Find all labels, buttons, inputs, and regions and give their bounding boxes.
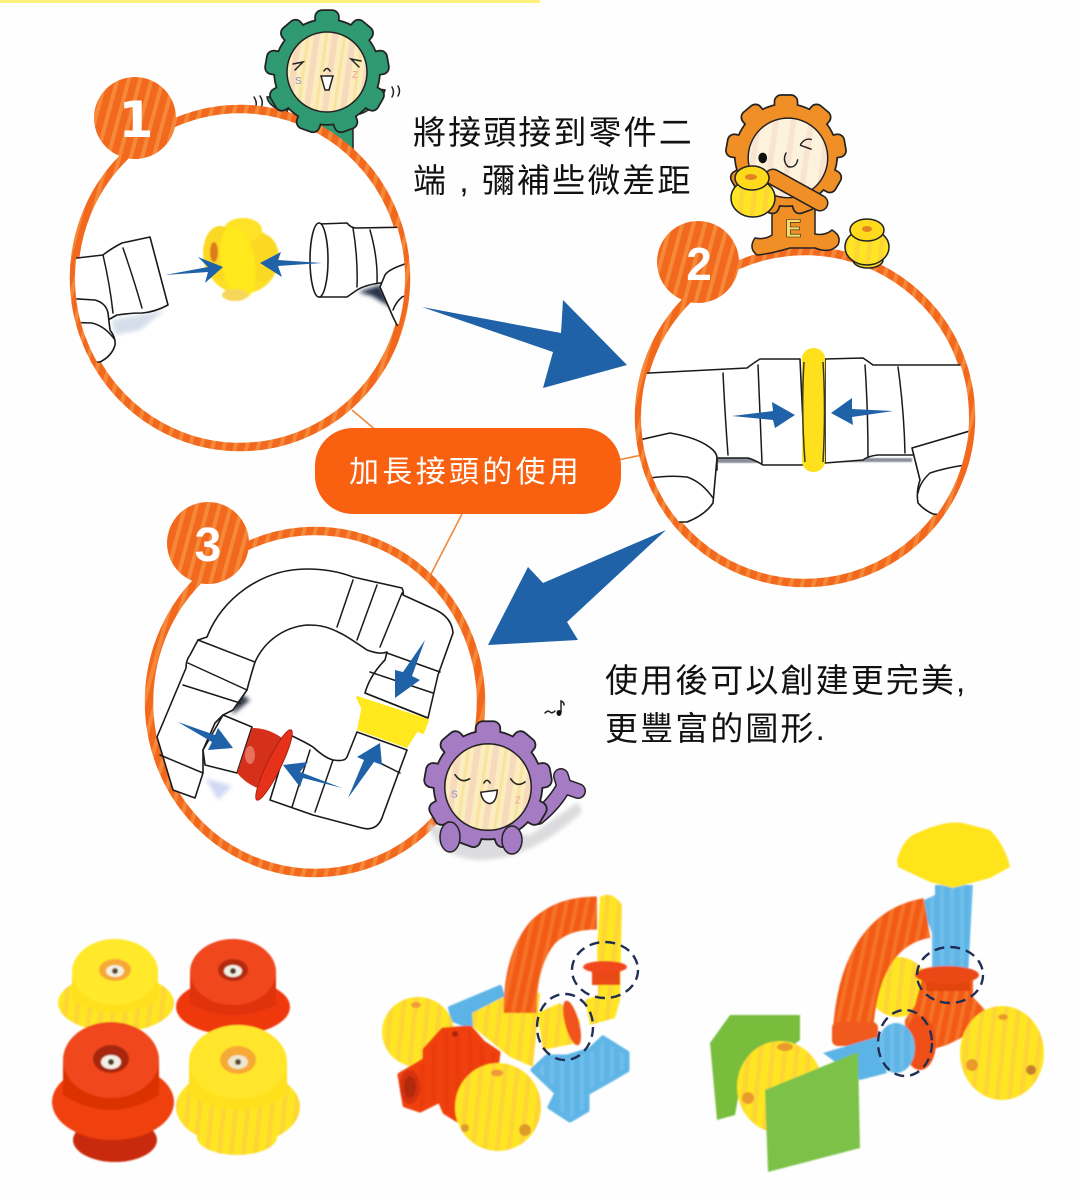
body <box>752 205 839 255</box>
label pill: title: 加長接頭的使用 <box>349 456 582 489</box>
head: Z <box>515 796 521 807</box>
icon: red connector <box>237 727 297 803</box>
heading text: top instruction <box>413 114 694 199</box>
photo: four connectors <box>52 939 300 1162</box>
badge: number 3: 3 <box>195 519 221 572</box>
yellow left ball <box>737 1041 823 1133</box>
text block: result description <box>605 662 967 747</box>
illustration: step 2 pipes <box>630 358 980 522</box>
text block: result description: 更豐富的圖形. <box>605 710 827 747</box>
blue vertical <box>920 885 973 975</box>
label pill: title <box>315 428 621 514</box>
orange arc <box>853 918 927 1030</box>
head <box>424 722 552 848</box>
connector lines to label <box>352 410 642 578</box>
yellow cube <box>472 993 540 1067</box>
dashed highlight circles <box>878 947 983 1076</box>
illustration: step 1 pipes <box>60 223 420 362</box>
text block: result description: 使用後可以創建更完美, <box>605 662 967 699</box>
character: green gear head: Z <box>352 70 358 81</box>
arm <box>773 177 820 203</box>
character: purple gear mascot <box>424 722 582 860</box>
head: S <box>451 789 458 800</box>
badge: number 1: 1 <box>119 91 153 149</box>
yellow left ball <box>382 997 454 1067</box>
arrow: step 2 right <box>831 398 893 425</box>
blue back tube <box>450 987 503 1027</box>
connector: yellow front right <box>176 1025 300 1155</box>
yellow right ball <box>960 1006 1044 1100</box>
connector: red back right <box>176 939 290 1035</box>
panel: step 1 circle <box>60 109 420 447</box>
orange arc <box>520 913 597 1013</box>
character: orange gear mascot <box>726 96 846 255</box>
yellow ball behind <box>868 957 928 1017</box>
red cross connector <box>400 1028 498 1120</box>
red ring on tube <box>592 970 620 985</box>
panel: step 2 circle <box>630 251 980 583</box>
yellow front ball <box>455 1063 541 1151</box>
orange tee <box>905 975 985 1050</box>
arrow: from step 1 to step 2 <box>422 300 627 388</box>
character: green gear mascot <box>254 86 400 150</box>
green front wedge <box>765 1052 860 1172</box>
panel: step 3 circle <box>149 531 481 873</box>
connector: yellow back left <box>58 939 174 1032</box>
green back wedge <box>710 1015 800 1120</box>
blue horizontal tube <box>823 1037 887 1080</box>
badge: number 2 <box>657 221 739 303</box>
blue tee <box>533 1038 627 1120</box>
arrow: step 3 a <box>178 722 233 750</box>
heading text: top instruction: 端 , 彌補些微差距 <box>413 162 693 199</box>
icon: music note <box>545 701 564 716</box>
badge: number 1 <box>94 77 176 159</box>
photo: toy assembly right <box>710 822 1044 1172</box>
icon: small yellow connector <box>845 219 889 268</box>
character: green gear head <box>265 11 389 133</box>
held connector <box>731 166 775 217</box>
dashed highlight circles <box>537 942 638 1060</box>
illustration: step 3 pipes <box>157 569 453 829</box>
heading text: top instruction: 將接頭接到零件二 <box>413 114 694 151</box>
arrow: step 3 c <box>348 743 382 798</box>
photo: toy assembly middle <box>382 895 638 1151</box>
yellow stub and red ring <box>537 1003 580 1050</box>
character: orange gear mascot: E <box>785 215 802 243</box>
icon: yellow ring <box>802 348 825 472</box>
yellow half cylinder <box>897 822 1010 888</box>
character: green gear head: S <box>295 76 302 87</box>
badge: number 2: 2 <box>686 238 712 290</box>
arrow: from step 2 to step 3 <box>488 530 666 645</box>
arrow: step 3 d <box>395 640 425 698</box>
arrow: step 2 left <box>732 402 795 428</box>
arrow: step 3 b <box>283 762 342 788</box>
arrow: step 1 left <box>165 257 223 283</box>
badge: number 3 <box>167 502 249 584</box>
head <box>726 96 846 214</box>
connector: red front left <box>52 1022 174 1162</box>
yellow vertical tube <box>585 895 622 1025</box>
icon: yellow connector <box>203 218 279 301</box>
arrow: step 1 right <box>260 252 322 277</box>
icon: yellow connector <box>357 693 428 748</box>
